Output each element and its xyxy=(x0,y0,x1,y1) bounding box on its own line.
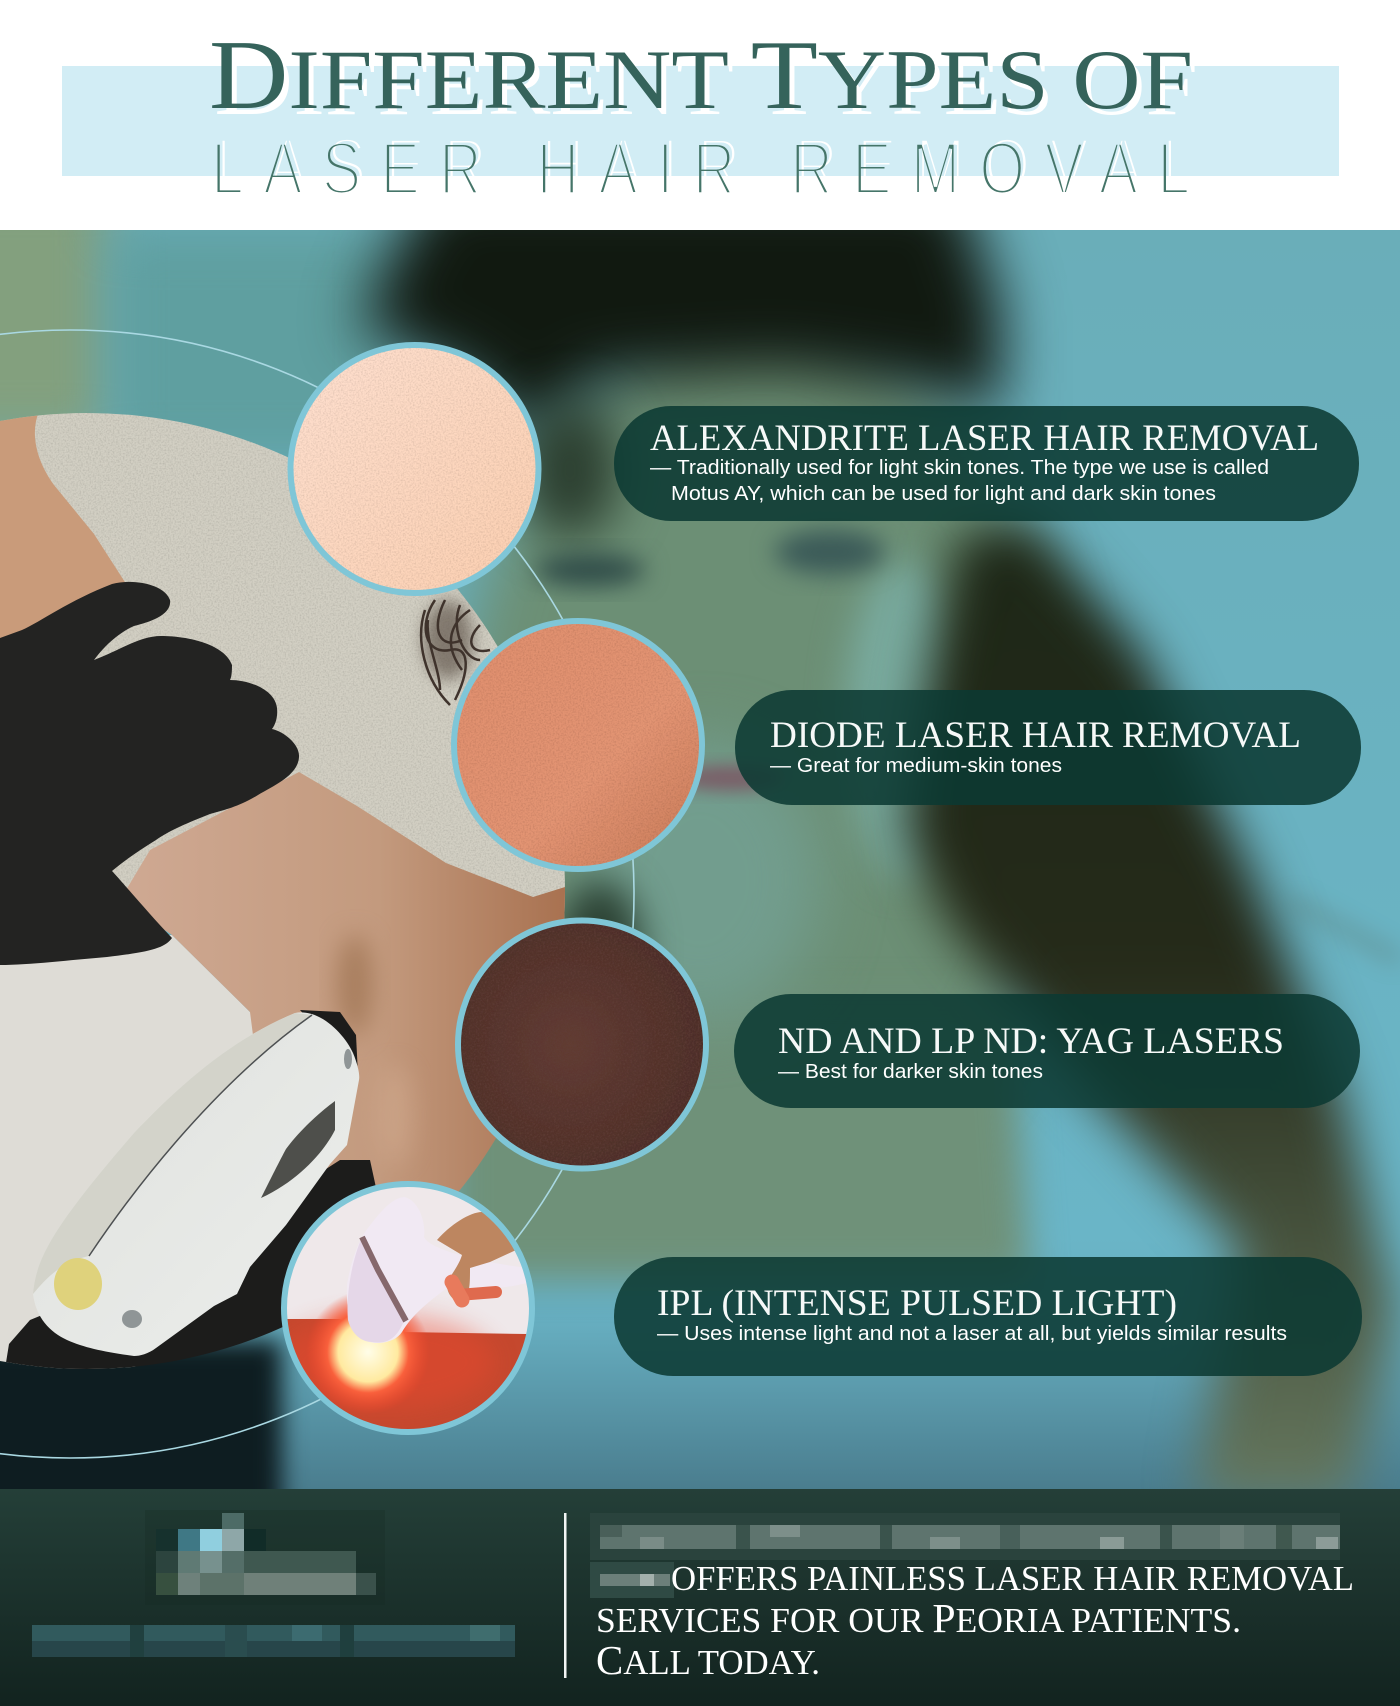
upper black glove xyxy=(0,582,299,965)
obscured business name mosaic xyxy=(590,1513,1340,1598)
torso skin xyxy=(127,772,565,1192)
pill: Alexandrite: — Traditionally used for light skin tones. The type we use is called xyxy=(650,456,1269,479)
upper arm skin xyxy=(0,416,125,638)
pill: Alexandrite: ALEXANDRITE LASER HAIR REMOVAL xyxy=(650,418,1319,459)
pill: ND and LP ND YAG: ND AND LP ND: YAG LASERS xyxy=(778,1021,1284,1062)
pill: ND and LP ND YAG: — Best for darker skin tones xyxy=(778,1060,1043,1083)
background: blurred portrait photo xyxy=(0,180,1400,1530)
pill: IPL xyxy=(614,1257,1362,1376)
pill: IPL: — Uses intense light and not a laser at all, but yields similar results xyxy=(657,1322,1287,1345)
decorative ring connecting circles xyxy=(0,330,634,1458)
pill: Diode: DIODE LASER HAIR REMOVAL xyxy=(770,715,1301,756)
title: Different Types of: DIFFERENT TYPES OF xyxy=(209,21,1193,130)
divider line xyxy=(564,1513,566,1678)
pill: Diode xyxy=(735,690,1361,805)
pill: IPL: IPL (INTENSE PULSED LIGHT) xyxy=(657,1283,1177,1324)
footer text: SERVICES FOR OUR PEORIA PATIENTS. xyxy=(596,1595,1241,1641)
circle: IPL device on skin xyxy=(275,1180,540,1440)
circle: medium skin xyxy=(454,621,702,869)
subtitle: Laser Hair Removal: LASER HAIR REMOVAL xyxy=(211,128,1190,211)
footer text: OFFERS PAINLESS LASER HAIR REMOVAL xyxy=(671,1559,1354,1598)
pill: Alexandrite: Motus AY, which can be used for light and dark skin tones xyxy=(671,482,1216,505)
pill: Alexandrite xyxy=(614,406,1359,521)
footer text: CALL TODAY. xyxy=(596,1637,820,1683)
footer text xyxy=(596,1559,1354,1683)
obscured address mosaic xyxy=(32,1625,515,1657)
device handpiece xyxy=(33,1012,359,1356)
circle: light skin xyxy=(290,345,538,593)
obscured logo mosaic xyxy=(145,1510,385,1605)
pill: Diode: — Great for medium-skin tones xyxy=(770,754,1062,777)
header band xyxy=(0,0,1400,230)
underarm hair xyxy=(421,600,490,705)
photo: laser treatment on underarm xyxy=(0,400,590,1400)
footer panel xyxy=(0,1489,1400,1706)
lower black glove xyxy=(6,1160,376,1369)
lower towel xyxy=(0,935,253,1369)
pill: ND and LP ND YAG xyxy=(734,994,1360,1108)
circle: dark skin xyxy=(458,920,706,1168)
